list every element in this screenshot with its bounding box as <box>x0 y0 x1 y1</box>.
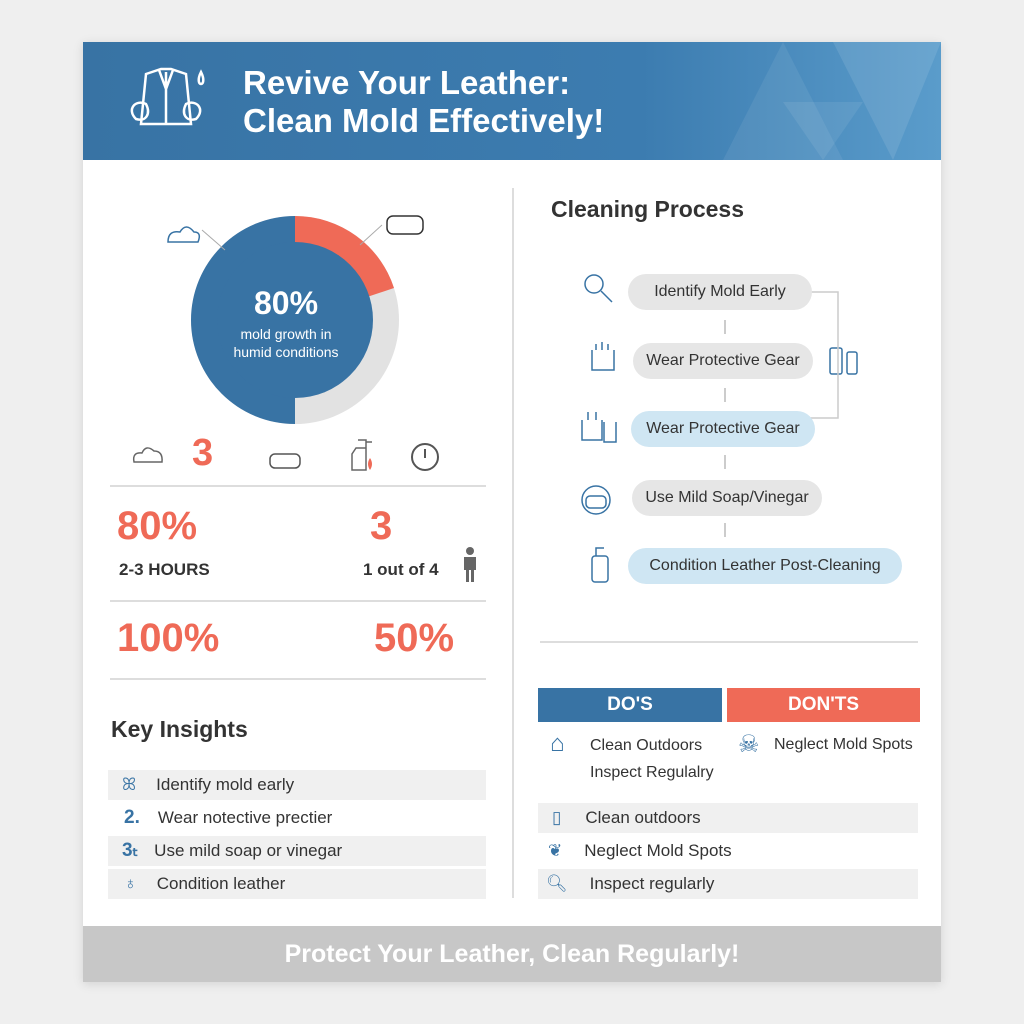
footer banner <box>83 926 941 982</box>
donut chart: 80% <box>254 285 318 321</box>
do's and don'ts: ⌂ <box>550 730 564 757</box>
stats: 1 out of 4 <box>363 560 439 579</box>
stats: 2-3 HOURS <box>119 560 210 579</box>
key insights: 3ₜ Use mild soap or vinegar <box>122 840 342 861</box>
cleaning process: Wear Protective Gear <box>646 420 800 437</box>
do's and don'ts <box>538 688 920 899</box>
stats: 80% <box>117 504 197 548</box>
key insights: 2. Wear notective prectier <box>124 807 332 828</box>
cleaning process: Use Mild Soap/Vinegar <box>645 489 809 506</box>
donut chart <box>167 215 424 424</box>
icon row: 3 <box>192 432 213 474</box>
title: Clean Mold Effectively! <box>243 102 604 139</box>
stats: 100% <box>117 616 219 660</box>
cleaning process: Condition Leather Post-Cleaning <box>649 557 881 574</box>
cleaning process: Cleaning Process <box>551 196 744 222</box>
stats: 50% <box>374 616 454 660</box>
vertical divider <box>512 188 514 898</box>
do's and don'ts: ❦ Neglect Mold Spots <box>548 841 732 860</box>
cleaning process <box>551 196 902 584</box>
do's and don'ts: ☠ <box>738 731 760 758</box>
header banner <box>83 42 941 160</box>
title <box>243 64 604 139</box>
footer banner: Protect Your Leather, Clean Regularly! <box>285 940 739 968</box>
icon row <box>132 432 439 474</box>
do's and don'ts: Inspect Regulalry <box>590 764 714 781</box>
cleaning process: Identify Mold Early <box>654 283 786 300</box>
do's and don'ts: DON'TS <box>788 694 859 715</box>
do's and don'ts: DO'S <box>607 694 653 715</box>
do's and don'ts: ▯ Clean outdoors <box>552 808 701 827</box>
donut chart: mold growth in <box>240 326 332 342</box>
do's and don'ts: Neglect Mold Spots <box>774 736 913 753</box>
cleaning process: Wear Protective Gear <box>646 352 800 369</box>
donut chart: humid conditions <box>233 344 339 360</box>
title: Revive Your Leather: <box>243 64 570 101</box>
do's and don'ts: 🔍︎ Inspect regularly <box>546 874 714 893</box>
do's and don'ts: Clean Outdoors <box>590 737 702 754</box>
stats <box>110 504 486 680</box>
stats: 3 <box>370 504 392 548</box>
key insights: ꕤ Identify mold early <box>122 775 294 794</box>
key insights: Key Insights <box>111 716 248 742</box>
key insights <box>108 716 486 899</box>
card <box>83 42 941 982</box>
key insights: ♁ Condition leather <box>124 874 285 893</box>
icon: leather jacket <box>130 68 204 126</box>
